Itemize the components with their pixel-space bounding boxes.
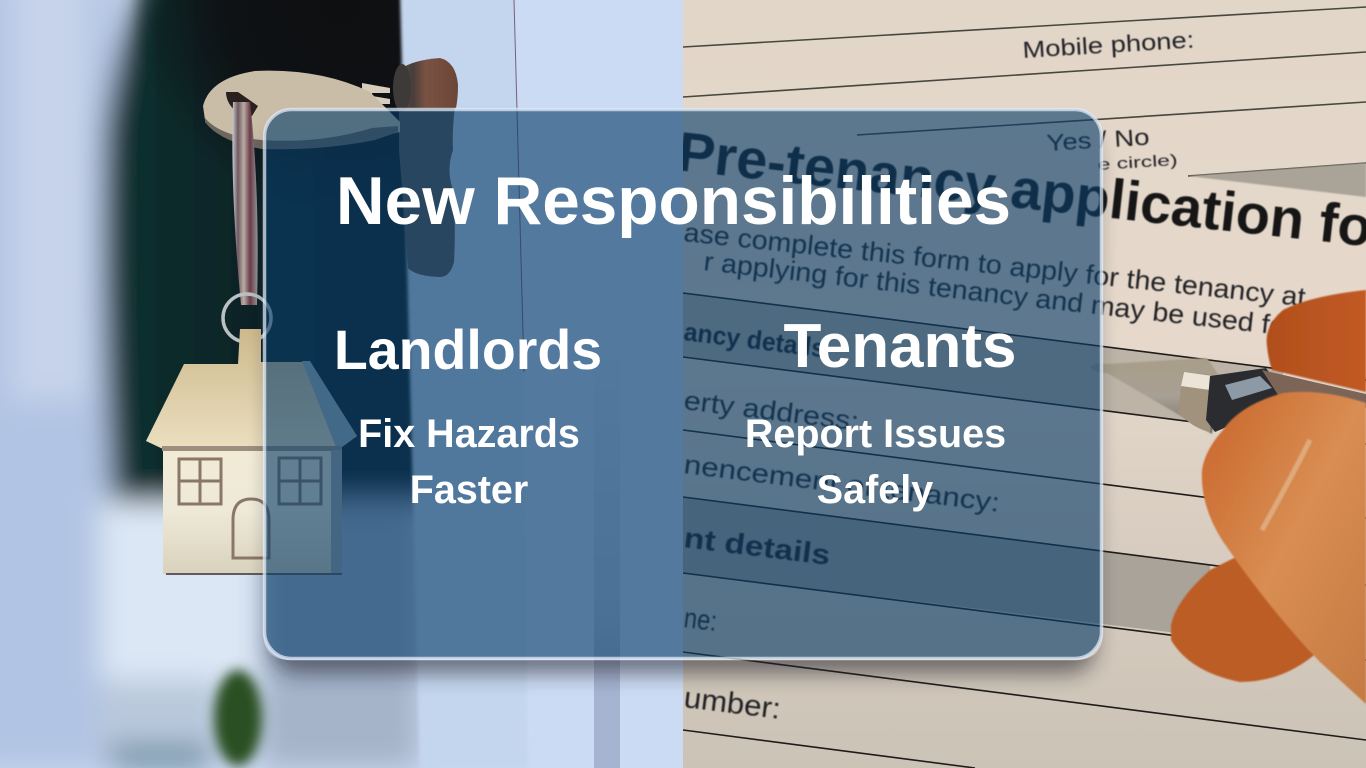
text: tenants responsibility: [745, 412, 1006, 512]
text: landlords responsibility: Faster: [410, 468, 528, 512]
text: tenancy details: ancy details: [682, 316, 827, 363]
text: application form heading: Pre-tenancy application fo: [675, 119, 1366, 259]
title: New Responsibilities: [336, 164, 1011, 239]
text: commencement of tenancy: nencement of tenancy:: [682, 449, 1002, 518]
text: landlords responsibility: [358, 412, 580, 512]
text: mobile phone: Mobile phone:: [1022, 27, 1195, 63]
small ring: [223, 294, 271, 342]
heading: tenants: Tenants: [783, 312, 1017, 381]
key: [203, 71, 400, 149]
text: instructions line 1: ase complete this form to apply for the tenancy at: [682, 217, 1308, 312]
column: tenants: [745, 312, 1017, 512]
photo: key in door with house keyring: [0, 0, 693, 768]
text: instructions line 2: r applying for this tenancy and may be used fo: [702, 246, 1287, 341]
text: circle note: e circle): [1097, 152, 1178, 174]
shadow wedge over the sheet: [1188, 163, 1366, 197]
table bands: [683, 293, 1283, 637]
key ring: [232, 102, 258, 305]
photo: pre-tenancy application form and hand with pen: [675, 0, 1366, 768]
panel shadow: [270, 128, 1096, 674]
text: property address: erty address:: [682, 385, 861, 436]
table lines: [683, 293, 1366, 768]
icon: pen: [1090, 358, 1366, 434]
text: number: umber:: [682, 681, 782, 726]
icon: fingers holding pen: [1171, 290, 1366, 704]
lock cylinder: [393, 58, 458, 277]
text: landlords responsibility: Fix Hazards: [358, 412, 580, 456]
panel: translucent card: [264, 110, 1102, 658]
icon: house keychain: [146, 329, 357, 575]
text: tenant details: nt details: [682, 522, 832, 572]
column: landlords: [334, 319, 602, 512]
text: yes no: Yes / No: [1046, 124, 1150, 156]
heading: landlords: Landlords: [334, 319, 602, 381]
text: tenants responsibility: Safely: [817, 468, 933, 512]
text: name: ne:: [682, 602, 719, 638]
text: tenants responsibility: Report Issues: [745, 412, 1006, 456]
blurred plant: [214, 670, 262, 766]
